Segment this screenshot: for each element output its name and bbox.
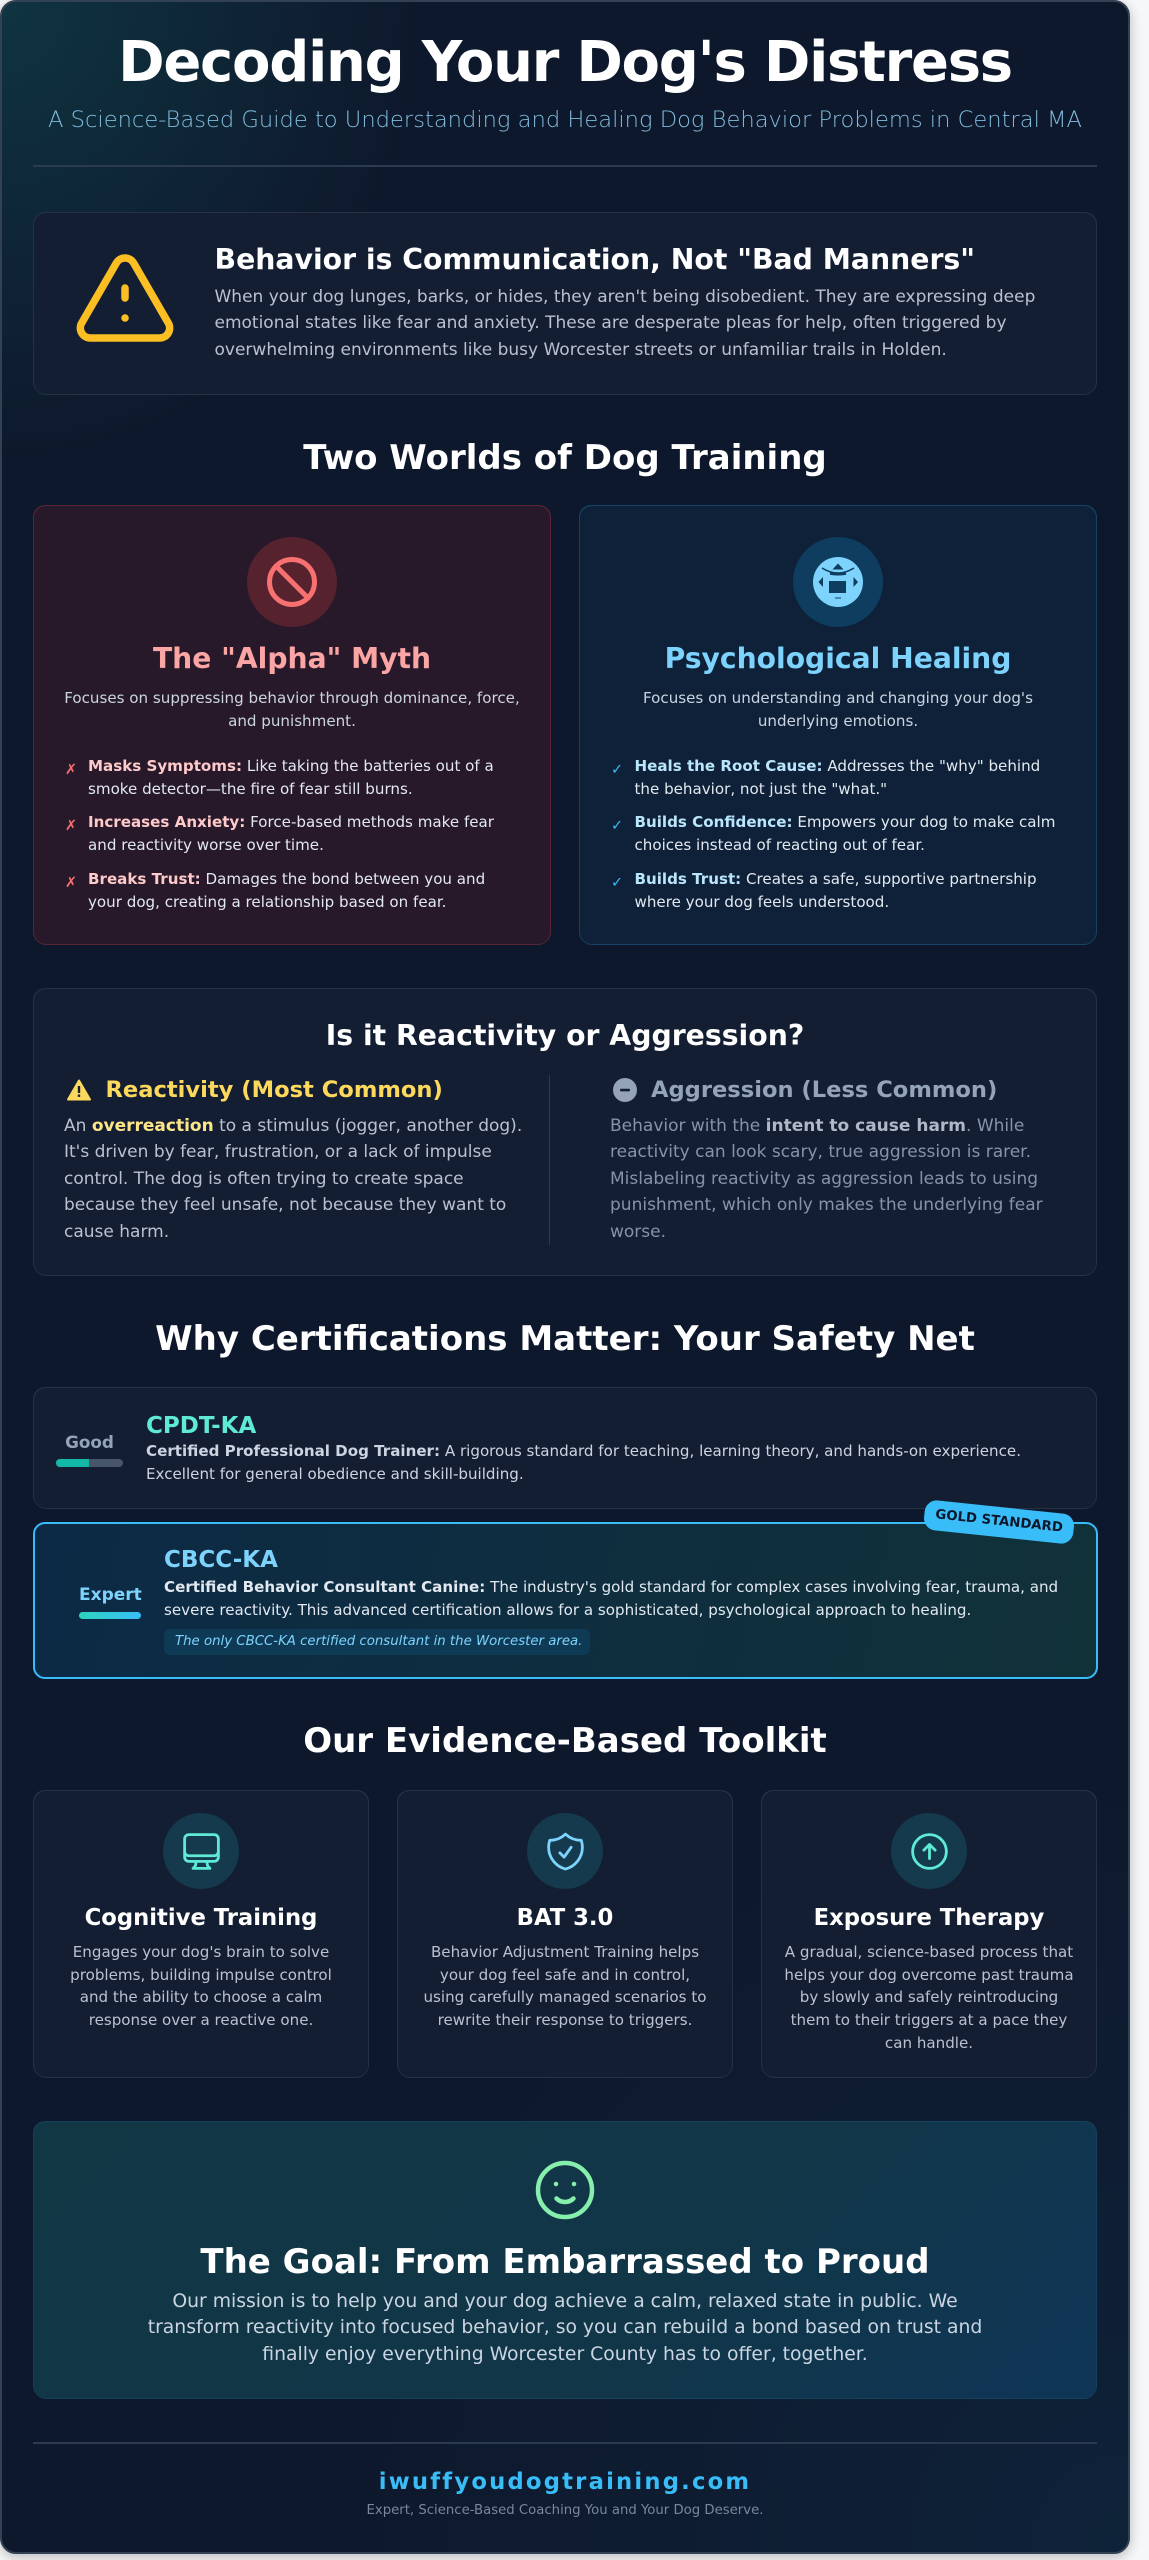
footer tagline: Expert, Science-Based Coaching You and Your Dog Deserve. (367, 2503, 763, 2518)
list item: builds trust: Builds Trust: Creates a safe, supportive partnership (634, 870, 1037, 888)
icon: ban (247, 537, 337, 627)
list item: builds trust: where your dog feels understood. (634, 893, 889, 911)
list item: heals root cause: Heals the Root Cause: Addresses the "why" behind (634, 757, 1040, 775)
list item: builds confidence (611, 813, 1055, 854)
list item: increases anxiety: ✗ (65, 818, 77, 834)
heading: two worlds: Two Worlds of Dog Training (303, 438, 827, 478)
text: cognitive: and the ability to choose a calm (80, 1988, 322, 2006)
list item: breaks trust: ✗ (65, 875, 77, 891)
meter: good: Good (65, 1432, 114, 1452)
text: exposure: helps your dog overcome past trauma (784, 1966, 1074, 1984)
healing description (643, 689, 1033, 730)
title: Decoding Your Dog's Distress (118, 30, 1012, 95)
text: reactivity (64, 1116, 522, 1242)
meter: expert: Expert (79, 1585, 142, 1605)
text: BAT: Behavior Adjustment Training helps (431, 1943, 699, 1961)
column: reactivity (64, 1077, 522, 1242)
panel: CBCC-KA (33, 1522, 1098, 1679)
intro text (214, 287, 1035, 360)
text: cognitive: Engages your dog's brain to solve (73, 1943, 329, 1961)
badge: gold standard: GOLD STANDARD (935, 1507, 1063, 1536)
panel: reactivity vs aggression (34, 988, 1096, 1275)
panel: CPDT-KA (34, 1387, 1096, 1508)
intro text: emotional states like fear and anxiety. These are desperate pleas for help, often triggered by (214, 313, 1007, 333)
list item: heals root cause: the behavior, not just the "what." (634, 780, 887, 798)
panel: behavior is communication (34, 212, 1096, 394)
intro text: overwhelming environments like busy Worcester streets or unfamiliar trails in Holden. (214, 340, 947, 360)
heading: cognitive: Cognitive Training (85, 1905, 317, 1931)
card: cognitive training (34, 1790, 368, 2077)
list item: masks symptoms: smoke detector—the fire of fear still burns. (88, 780, 413, 798)
heading: reactivity: Reactivity (Most Common) (106, 1077, 443, 1103)
icon: minus circle (613, 1078, 637, 1102)
text: aggression: reactivity can look scary, true aggression is rarer. (610, 1142, 1031, 1162)
heading: goal: The Goal: From Embarrassed to Proud (200, 2242, 930, 2282)
intro text: When your dog lunges, barks, or hides, they aren't being disobedient. They are expressing deep (214, 287, 1035, 307)
text: reactivity: An overreaction to a stimulus (jogger, another dog). (64, 1116, 522, 1136)
text: exposure: them to their triggers at a pace they (791, 2011, 1067, 2029)
callout: only CBCC-KA: The only CBCC-KA certified consultant in the Worcester area. (175, 1634, 582, 1649)
heading: reactivity or aggression: Is it Reactivity or Aggression? (326, 1019, 804, 1052)
text: reactivity: control. The dog is often trying to create space (64, 1169, 464, 1189)
text: CPDT-KA (146, 1442, 1021, 1483)
heading: certifications: Why Certifications Matter: Your Safety Net (155, 1319, 975, 1359)
heading: alpha: The "Alpha" Myth (153, 642, 431, 675)
heading: healing: Psychological Healing (665, 642, 1011, 675)
text: goal: transform reactivity into focused behavior, so you can rebuild a bond based on trust and (148, 2317, 982, 2338)
list item: masks symptoms: ✗ (65, 762, 77, 778)
list item: breaks trust: your dog, creating a relationship based on fear. (88, 893, 446, 911)
list item: builds trust: ✓ (611, 875, 623, 891)
list item: builds confidence: ✓ (611, 818, 623, 834)
text: CPDT-KA: Excellent for general obedience and skill-building. (146, 1465, 524, 1483)
text: exposure: can handle. (885, 2034, 973, 2052)
list item: breaks trust: Breaks Trust: Damages the bond between you and (88, 870, 485, 888)
text: BAT: rewrite their response to triggers. (438, 2011, 692, 2029)
text: cognitive: problems, building impulse control (70, 1966, 332, 1984)
text: aggression: worse. (610, 1222, 666, 1242)
heading: CBCC-KA: CBCC-KA (164, 1547, 278, 1573)
icon: monitor (163, 1813, 239, 1889)
text: CPDT-KA: Certified Professional Dog Trainer: A rigorous standard for teaching, learning theory, and hands-on experience. (146, 1442, 1021, 1460)
list item: builds confidence: choices instead of reacting out of fear. (634, 836, 925, 854)
text: CBCC-KA (164, 1578, 1058, 1619)
heading: BAT: BAT 3.0 (517, 1905, 613, 1931)
list item: masks symptoms: Masks Symptoms: Like taking the batteries out of a (88, 757, 494, 775)
card: exposure therapy (762, 1790, 1096, 2077)
text: goal: Our mission is to help you and your dog achieve a calm, relaxed state in public. We (172, 2291, 958, 2312)
text: goal (148, 2291, 982, 2365)
meter: expert (79, 1585, 142, 1619)
list item: increases anxiety (65, 813, 494, 854)
icon: shield (527, 1813, 603, 1889)
alpha description: and punishment. (228, 712, 356, 730)
text: exposure: A gradual, science-based process that (785, 1943, 1073, 1961)
text: exposure: by slowly and safely reintroducing (800, 1988, 1058, 2006)
list item: masks symptoms (65, 757, 494, 798)
text: reactivity: It's driven by fear, frustration, or a lack of impulse (64, 1142, 492, 1162)
healing description: Focuses on understanding and changing your dog's (643, 689, 1033, 707)
heading: exposure: Exposure Therapy (814, 1905, 1044, 1931)
text: cognitive (70, 1943, 332, 2029)
text: goal: finally enjoy everything Worcester County has to offer, together. (262, 2344, 868, 2365)
list item: builds confidence: Builds Confidence: Empowers your dog to make calm (634, 813, 1055, 831)
footer website: iwuffyoudogtraining.com (379, 2469, 751, 2495)
text: cognitive: response over a reactive one. (89, 2011, 313, 2029)
text: reactivity: cause harm. (64, 1222, 169, 1242)
alpha description (64, 689, 520, 730)
column: aggression (610, 1077, 1043, 1242)
text: aggression: punishment, which only makes the underlying fear (610, 1195, 1043, 1215)
intro heading: Behavior is Communication, Not "Bad Manners" (214, 243, 975, 276)
healing description: underlying emotions. (758, 712, 918, 730)
icon: globe (793, 537, 883, 627)
badge: gold standard (923, 1499, 1075, 1545)
icon: warning triangle (76, 254, 174, 342)
list item: builds trust (611, 870, 1037, 911)
alpha description: Focuses on suppressing behavior through dominance, force, (64, 689, 520, 707)
list item: breaks trust (65, 870, 485, 911)
text: aggression (610, 1116, 1043, 1242)
text: CBCC-KA: Certified Behavior Consultant Canine: The industry's gold standard for complex cases involving fear, trauma, and (164, 1578, 1058, 1596)
icon: smile (536, 2160, 594, 2220)
icon: arrow up circle (891, 1813, 967, 1889)
text: aggression: Behavior with the intent to cause harm. While (610, 1116, 1024, 1136)
callout: only CBCC-KA (164, 1629, 590, 1655)
icon: warning (67, 1080, 91, 1100)
list item: increases anxiety: and reactivity worse over time. (88, 836, 324, 854)
text: BAT: your dog feel safe and in control, (440, 1966, 690, 1984)
card: BAT 3.0 (398, 1790, 732, 2077)
text: BAT (423, 1943, 706, 2029)
text: aggression: Mislabeling reactivity as aggression leads to using (610, 1169, 1038, 1189)
panel: alpha myth (34, 505, 550, 944)
heading: aggression: Aggression (Less Common) (651, 1077, 997, 1103)
list item: heals root cause: ✓ (611, 762, 623, 778)
panel: the goal (34, 2121, 1096, 2398)
heading: CPDT-KA: CPDT-KA (146, 1413, 256, 1439)
text: reactivity: because they feel unsafe, not because they want to (64, 1195, 506, 1215)
meter: good (56, 1432, 123, 1467)
heading: toolkit: Our Evidence-Based Toolkit (303, 1721, 827, 1761)
text: exposure (784, 1943, 1074, 2052)
text: CBCC-KA: severe reactivity. This advanced certification allows for a sophisticated, psychological approach to healing. (164, 1601, 971, 1619)
panel: psychological healing (580, 505, 1096, 944)
list item: increases anxiety: Increases Anxiety: Force-based methods make fear (88, 813, 494, 831)
text: BAT: using carefully managed scenarios to (423, 1988, 706, 2006)
subtitle: A Science-Based Guide to Understanding and Healing Dog Behavior Problems in Central MA (48, 107, 1082, 133)
list item: heals root cause (611, 757, 1040, 798)
